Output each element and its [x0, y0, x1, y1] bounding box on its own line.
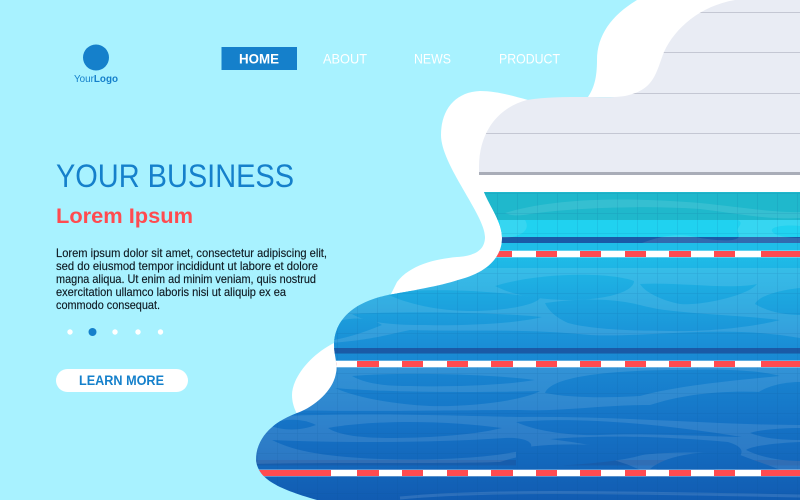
logo mark	[83, 44, 109, 70]
water caustic pockets	[268, 275, 800, 470]
logo text: YourLogo	[74, 73, 118, 85]
body text: Lorem ipsum dolor sit amet, consectetur adipiscing elit,	[56, 246, 327, 260]
nav item: news: NEWS	[414, 50, 451, 66]
lane rope 2	[330, 360, 800, 368]
navigation	[222, 47, 560, 70]
water caustic thin lines	[400, 492, 800, 498]
pool deck	[479, 0, 800, 192]
nav item: product: PRODUCT	[499, 50, 560, 66]
body text: exercitation ullamco laboris nisi ut aliquip ex ea	[56, 285, 286, 299]
subtitle: Lorem Ipsum	[56, 205, 193, 228]
water caustics: upper lane	[500, 199, 800, 243]
button: learn more: LEARN MORE	[79, 373, 164, 388]
pool illustration	[250, 0, 800, 500]
lane rope 1	[490, 250, 800, 258]
white wave shape	[292, 0, 800, 414]
lane floor lines	[250, 237, 800, 466]
logo	[74, 44, 118, 85]
body text: magna aliqua. Ut enim ad minim veniam, quis nostrud	[56, 272, 316, 286]
pool tile grid	[250, 193, 800, 500]
water	[250, 192, 800, 500]
body text: sed do eiusmod tempor incididunt ut labore et dolore	[56, 259, 318, 273]
nav item: home	[222, 47, 297, 70]
body text: commodo consequat.	[56, 298, 160, 312]
nav item: about: ABOUT	[323, 50, 367, 66]
body text	[56, 246, 327, 312]
button: learn more	[56, 369, 188, 392]
nav item: home: HOME	[239, 50, 279, 66]
title: YOUR BUSINESS	[56, 158, 294, 194]
water caustics: light bands	[250, 268, 800, 472]
pagination dots	[67, 328, 163, 336]
lane rope 3	[250, 469, 800, 477]
